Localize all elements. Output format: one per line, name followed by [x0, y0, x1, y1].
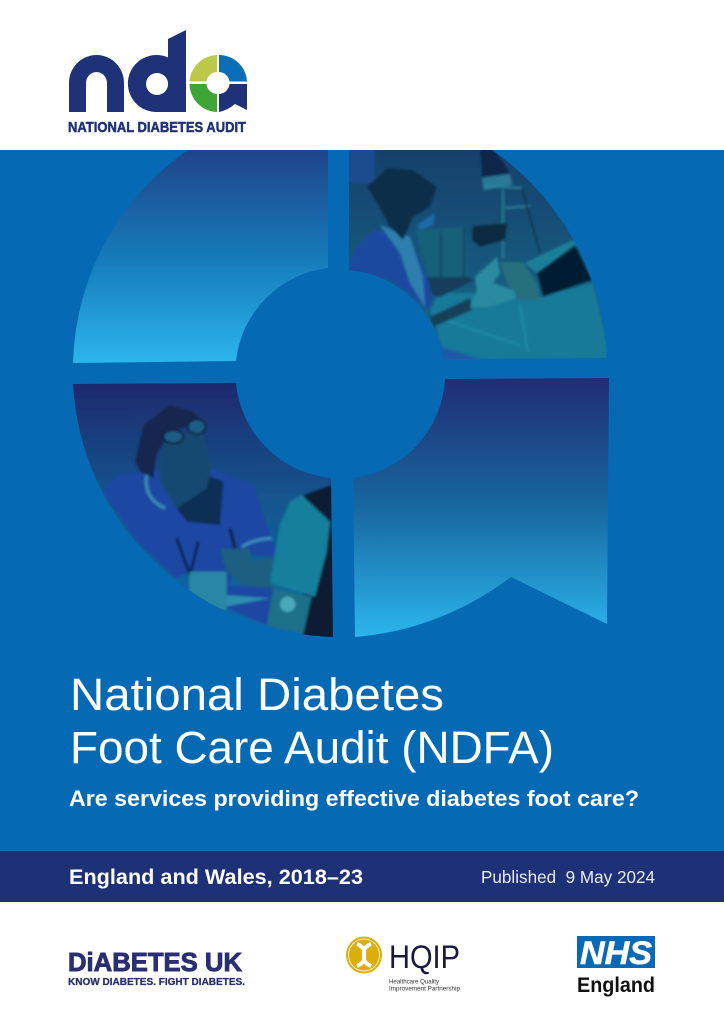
logo: NHS England [577, 935, 655, 997]
logo quartered circle [190, 55, 247, 112]
logo wordmark: NATIONAL DIABETES AUDIT [68, 119, 246, 136]
coverage: England and Wales, 2018–23 [69, 866, 363, 889]
title: Foot Care Audit (NDFA) [70, 722, 554, 773]
quadrant: top-right photo of foot examination [345, 146, 615, 364]
title [70, 669, 554, 773]
title: National Diabetes [70, 669, 444, 720]
logo letter n [69, 55, 124, 112]
logo: HQIP: Healthcare Quality [389, 980, 439, 986]
HQIP emblem [346, 936, 382, 974]
logo: Diabetes UK: KNOW DIABETES. FIGHT DIABETES. [68, 976, 245, 988]
quadrant: bottom-left photo of nurse [69, 379, 339, 647]
logo: HQIP: HQIP [389, 939, 460, 975]
quadrant: bottom-right gradient bookmark [353, 378, 609, 637]
logo: NHS England: NHS [580, 935, 653, 971]
blue cover background [0, 150, 724, 851]
logo letter d [128, 30, 186, 112]
logo: Diabetes UK: DiABETES UK [68, 947, 242, 977]
publication date: Published 9 May 2024 [481, 867, 655, 887]
logo: National Diabetes Audit [68, 30, 247, 136]
footer band [0, 851, 724, 902]
quadrant: top-left gradient [73, 150, 328, 363]
subtitle: Are services providing effective diabetes foot care? [69, 786, 639, 811]
logo: HQIP: Improvement Partnership [389, 986, 461, 992]
logo: HQIP [346, 936, 461, 992]
logo: NHS England: England [577, 973, 655, 997]
